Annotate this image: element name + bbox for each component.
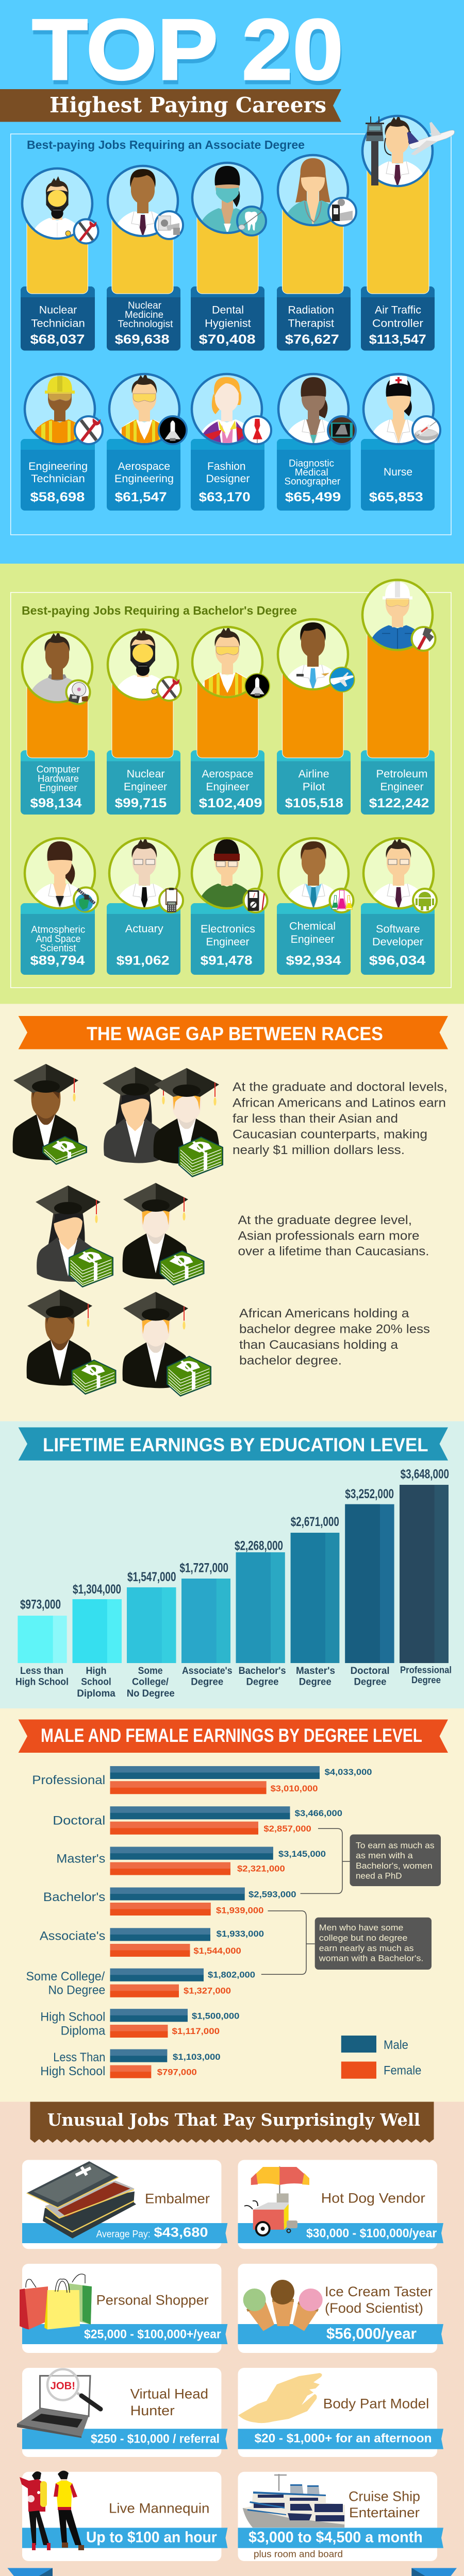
bar labels: Degree [354, 1677, 387, 1688]
job: Diagnostic Medical Sonographer: Sonographer [285, 477, 341, 487]
ribbon heading: THE WAGE GAP BETWEEN RACES [87, 1023, 383, 1044]
graduates group 1 [13, 1064, 223, 1177]
job: Electronics Engineer [191, 838, 267, 975]
job: Nuclear Medicine Technologist: Nuclear [128, 300, 162, 311]
bar values: $3,252,000 [345, 1487, 394, 1501]
male values: $1,500,000 [192, 2011, 239, 2021]
subtitle ribbon [0, 89, 341, 122]
callout: PhD: To earn as much as [356, 1840, 435, 1850]
bar labels: Bachelor's [239, 1666, 286, 1676]
horizontal bar chart [26, 1766, 372, 2078]
card: Ice Cream Taster: $56,000/year [326, 2326, 417, 2342]
job: Aerospace Engineering: Engineering [114, 473, 174, 485]
card: Live Mannequin: Live Mannequin [109, 2501, 209, 2516]
callout: PhD: as men with a [356, 1851, 413, 1860]
job: Diagnostic Medical Sonographer [277, 374, 356, 511]
ribbon heading [19, 1427, 448, 1461]
graduates group 2 [36, 1183, 204, 1287]
male values: $4,033,000 [325, 1767, 372, 1777]
job: Radiation Therapist: Radiation [288, 304, 334, 316]
male values: $3,145,000 [278, 1849, 326, 1859]
job: Petroleum Engineer: Engineer [380, 781, 424, 793]
job: Computer Hardware Engineer: Hardware [38, 774, 79, 785]
job: Fashion Designer: Fashion [207, 461, 246, 472]
text: bachelor degree gap: bachelor degree make 20% less [239, 1322, 430, 1336]
text: bachelor degree gap: than Caucasians holding a [239, 1338, 399, 1352]
bar values [20, 1467, 449, 1612]
text: graduate degree level: Asian professionals earn more [238, 1229, 420, 1243]
bar values: $1,304,000 [73, 1582, 121, 1597]
female values: $1,327,000 [184, 1986, 231, 1995]
heading: bachelor degree: Best-paying Jobs Requiring a Bachelor's Degree [22, 604, 297, 617]
text: graduate degree level [238, 1213, 429, 1258]
job: Engineering Technician: Technician [31, 473, 85, 485]
degree labels [26, 1773, 106, 2078]
job: Radiation Therapist: $76,627 [285, 332, 339, 347]
bar labels: Diploma [77, 1688, 115, 1699]
job: Chemical Engineer: $92,934 [286, 954, 341, 968]
female values: $1,117,000 [172, 2026, 220, 2036]
degree labels: Some College/ [26, 1970, 105, 1984]
job: Actuary: Actuary [125, 923, 163, 935]
job: Petroleum Engineer: $122,242 [369, 796, 429, 810]
section: top 20 highest paying careers [0, 2568, 464, 2576]
job: Nuclear Medicine Technologist [107, 166, 183, 350]
panel frame [11, 134, 451, 535]
text: graduate and doctoral levels: African Americans and Latinos earn [233, 1096, 446, 1110]
job: Chemical Engineer [277, 838, 354, 975]
female values: $797,000 [157, 2067, 197, 2077]
job: Petroleum Engineer: Petroleum [376, 768, 428, 780]
section: male and female earnings [0, 1708, 464, 2102]
text: bachelor degree gap [239, 1307, 430, 1368]
job: Computer Hardware Engineer [21, 631, 95, 815]
graduates group 3 [27, 1290, 211, 1396]
text: graduate and doctoral levels [233, 1080, 448, 1157]
panel frame [11, 592, 451, 988]
banner heading [30, 2102, 434, 2143]
degree labels: High School [40, 2010, 105, 2024]
text: graduate and doctoral levels: At the graduate and doctoral levels, [233, 1080, 448, 1094]
female values [157, 1784, 318, 2077]
bar labels: Associate's [182, 1666, 233, 1676]
job: Airline Pilot: $105,518 [285, 796, 343, 810]
job: Chemical Engineer: Engineer [291, 934, 335, 945]
bar labels: High [86, 1666, 106, 1676]
illustration: shopping bags [20, 2274, 92, 2330]
job: Engineering Technician: $58,698 [30, 490, 85, 504]
job: Actuary: $91,062 [117, 954, 170, 968]
text: graduate and doctoral levels: nearly $1 million dollars less. [233, 1143, 405, 1157]
female values: $2,857,000 [263, 1824, 311, 1834]
text: bachelor degree gap: African Americans holding a [239, 1307, 409, 1320]
card: Hot Dog Vendor [238, 2160, 443, 2249]
job: Nuclear Engineer [107, 629, 181, 815]
job: Petroleum Engineer [361, 580, 435, 815]
job: Air Traffic Controller: Controller [372, 317, 423, 329]
job: Nuclear Engineer: $99,715 [115, 796, 167, 810]
illustration: laptop with magnifier: JOB! [51, 2380, 75, 2392]
job: Computer Hardware Engineer: Engineer [39, 783, 77, 794]
job: Software Developer [361, 837, 437, 975]
callout: some college [315, 1918, 432, 1970]
job: Nurse [361, 374, 440, 511]
job: Nuclear Engineer: Nuclear [127, 768, 165, 780]
text: graduate and doctoral levels: Caucasian counterparts, making [233, 1127, 427, 1142]
text: bachelor degree gap: bachelor degree. [239, 1354, 342, 1368]
illustration: cruise ship [243, 2474, 345, 2528]
card: Hot Dog Vendor: Hot Dog Vendor [321, 2190, 425, 2206]
job: Engineering Technician: Engineering [28, 461, 88, 472]
job: Nuclear Technician: $68,037 [30, 332, 85, 347]
job: Actuary [107, 837, 183, 975]
job: Aerospace Engineering [107, 373, 187, 511]
job: Fashion Designer: Designer [206, 473, 250, 485]
bar labels: Some [138, 1666, 163, 1676]
male values [173, 1767, 372, 2062]
job: Nuclear Engineer: Engineer [124, 781, 167, 793]
job: Fashion Designer: $63,170 [199, 490, 251, 504]
bar labels: High School [15, 1677, 69, 1688]
illustration: hot dog cart [244, 2166, 309, 2235]
card: Ice Cream Taster [238, 2264, 443, 2353]
callout connector: PhD [301, 1828, 350, 1893]
text: graduate and doctoral levels: far less than their Asian and [233, 1112, 398, 1126]
job: Air Traffic Controller: Air Traffic [375, 304, 421, 316]
ribbon heading [19, 1720, 448, 1753]
card: Hot Dog Vendor: $30,000 - $100,000/year [306, 2226, 437, 2240]
card: Personal Shopper: $25,000 - $100,000+/year [84, 2327, 221, 2341]
job: Atmospheric And Space Scientist [21, 838, 98, 975]
job: Nurse: Nurse [384, 466, 412, 478]
job: Nuclear Technician: Nuclear [39, 304, 77, 316]
legend [341, 2036, 421, 2079]
job: Nuclear Technician: Technician [31, 317, 85, 329]
bar labels: Degree [246, 1677, 278, 1688]
title: TOP 20: TOP 20 [32, 1, 343, 98]
card: Body Part Model: Body Part Model [323, 2396, 429, 2411]
card: Cruise Ship Entertainer: plus room and board [254, 2549, 343, 2559]
text: graduate degree level: At the graduate degree level, [238, 1213, 412, 1227]
card: Live Mannequin [20, 2470, 227, 2561]
job: Aerospace Engineer: Engineer [206, 781, 250, 793]
job: Computer Hardware Engineer: Computer [37, 765, 80, 775]
ribbon heading [19, 1016, 448, 1049]
card: Ice Cream Taster: Ice Cream Taster [325, 2284, 433, 2299]
section: associate degree jobs [0, 0, 464, 564]
illustration: coffin [27, 2161, 136, 2239]
text: graduate degree level: over a lifetime than Caucasians. [238, 1244, 429, 1258]
banner heading: Unusual Jobs That Pay Surprisingly Well [47, 2110, 420, 2130]
bar chart [15, 1467, 452, 1699]
female values: $1,939,000 [216, 1906, 263, 1916]
legend: Female [384, 2064, 421, 2078]
heading: associate degree: Best-paying Jobs Requiring an Associate Degree [27, 138, 305, 151]
section: bachelor degree jobs [0, 564, 464, 1004]
bar values: $973,000 [20, 1597, 61, 1612]
job: Engineering Technician [21, 374, 103, 511]
legend: Male [384, 2038, 408, 2052]
bar labels: Professional [400, 1665, 452, 1675]
card: Ice Cream Taster: (Food Scientist) [325, 2300, 423, 2316]
job: Atmospheric And Space Scientist: Scientist [40, 943, 76, 954]
bar values: $1,547,000 [127, 1570, 176, 1584]
bar labels: Degree [299, 1677, 332, 1688]
female values: $1,544,000 [193, 1946, 241, 1956]
job: Electronics Engineer: $91,478 [201, 954, 253, 968]
bar values: $2,671,000 [291, 1515, 339, 1529]
bar labels: Degree [191, 1677, 223, 1688]
bar values: $3,648,000 [401, 1467, 449, 1482]
job: Nurse: $65,853 [369, 490, 423, 504]
job: Computer Hardware Engineer: $98,134 [30, 796, 82, 810]
job: Aerospace Engineering: $61,547 [115, 490, 167, 504]
job: Nuclear Technician [21, 168, 98, 350]
bar labels: School [81, 1677, 111, 1688]
card: Cruise Ship Entertainer: Entertainer [349, 2505, 420, 2520]
illustration: laptop with magnifier [17, 2369, 101, 2438]
card: Personal Shopper [20, 2264, 227, 2353]
job: Airline Pilot: Airline [299, 768, 329, 780]
card: Body Part Model [238, 2368, 443, 2457]
callout: some college: Men who have some [319, 1923, 403, 1933]
bar labels: College/ [132, 1677, 169, 1688]
card: Live Mannequin: Up to $100 an hour [86, 2529, 217, 2546]
job: Dental Hygienist [191, 163, 266, 350]
subtitle ribbon: Highest Paying Careers [49, 93, 326, 117]
job: Diagnostic Medical Sonographer: Medical [295, 467, 328, 478]
job: Nuclear Medicine Technologist: Technologist [118, 319, 173, 330]
degree labels: Master's [56, 1852, 105, 1866]
callout: PhD: Bachelor's, women [356, 1861, 433, 1871]
job: Aerospace Engineer: Aerospace [202, 768, 254, 780]
job: Atmospheric And Space Scientist: And Space [36, 934, 80, 945]
bar labels: No Degree [127, 1688, 175, 1699]
bar values: $1,727,000 [179, 1561, 228, 1575]
card: Virtual Head Hunter: $250 - $10,000 / referral [91, 2432, 220, 2446]
job: Air Traffic Controller: $113,547 [369, 332, 426, 347]
card: Embalmer: Average Pay: [96, 2229, 151, 2240]
callout: PhD: need a PhD [356, 1871, 402, 1881]
degree labels: High School [40, 2064, 105, 2078]
female values: $3,010,000 [271, 1784, 318, 1793]
male values: $1,802,000 [208, 1970, 255, 1979]
male values: $2,593,000 [248, 1889, 296, 1899]
bar labels: Doctoral [351, 1666, 390, 1676]
degree labels: Less Than [53, 2050, 105, 2064]
male values: $1,103,000 [173, 2052, 221, 2062]
card: Personal Shopper: Personal Shopper [96, 2293, 209, 2308]
illustration: ice cream cones [243, 2280, 323, 2331]
bar labels: Less than [20, 1666, 63, 1676]
card: Embalmer [22, 2160, 227, 2249]
callout connector: some college [261, 1911, 315, 1974]
degree labels: Doctoral [53, 1814, 105, 1828]
job: Diagnostic Medical Sonographer: Diagnostic [289, 458, 334, 469]
callout: some college: earn nearly as much as [319, 1943, 413, 1953]
card: Cruise Ship Entertainer [238, 2472, 443, 2561]
card: Embalmer: Embalmer [145, 2191, 210, 2206]
job: Dental Hygienist: Hygienist [205, 317, 251, 329]
degree labels: Bachelor's [43, 1890, 105, 1904]
job: Diagnostic Medical Sonographer: $65,499 [285, 490, 341, 504]
job: Airline Pilot: Pilot [303, 781, 325, 793]
bar labels: Master's [296, 1666, 335, 1676]
card: Cruise Ship Entertainer: Cruise Ship [349, 2488, 420, 2504]
degree labels: Professional [32, 1773, 105, 1787]
job: Electronics Engineer: Engineer [206, 936, 250, 948]
section: lifetime earnings by education level [0, 1421, 464, 1708]
section: unusual jobs [0, 2102, 464, 2576]
job: Fashion Designer [191, 374, 271, 511]
job: Chemical Engineer: Chemical [289, 921, 336, 933]
bar values: $2,268,000 [235, 1538, 283, 1553]
job: Dental Hygienist: Dental [212, 304, 244, 316]
title: TOP 20: TOP 20 [33, 5, 344, 102]
female values: $2,321,000 [237, 1864, 285, 1873]
male values: $3,466,000 [295, 1808, 342, 1818]
job: Electronics Engineer: Electronics [201, 923, 255, 935]
job: Software Developer: $96,034 [369, 954, 426, 968]
job: Atmospheric And Space Scientist: $89,794 [30, 954, 85, 968]
degree labels: Diploma [61, 2024, 106, 2038]
job: Nuclear Medicine Technologist: $69,638 [115, 332, 170, 347]
callout: PhD [350, 1835, 441, 1886]
job: Nuclear Medicine Technologist: Medicine [125, 310, 163, 320]
job: Aerospace Engineer [191, 626, 269, 815]
male values: $1,933,000 [217, 1929, 264, 1939]
card: Body Part Model: $20 - $1,000+ for an afternoon [255, 2431, 432, 2445]
job: Radiation Therapist: Therapist [288, 317, 334, 329]
card: Cruise Ship Entertainer: $3,000 to $4,500 a month [248, 2529, 423, 2546]
banner heading [7, 2568, 457, 2576]
job: Dental Hygienist: $70,408 [199, 332, 256, 347]
job: Software Developer: Software [376, 923, 420, 935]
job: Radiation Therapist [277, 155, 356, 350]
card: Virtual Head Hunter: Virtual Head [130, 2386, 208, 2401]
section: wage gap between races [0, 1004, 464, 1421]
card: Virtual Head Hunter: Hunter [130, 2403, 175, 2418]
callout: some college: woman with a Bachelor's. [319, 1954, 423, 1963]
illustration: mannequins [20, 2470, 84, 2550]
job: Aerospace Engineering: Aerospace [118, 461, 170, 472]
bar labels: Degree [411, 1675, 441, 1685]
card: Virtual Head Hunter [17, 2368, 227, 2457]
degree labels: Associate's [40, 1929, 105, 1943]
job: Software Developer: Developer [372, 936, 423, 948]
job: Airline Pilot [277, 619, 354, 815]
bar labels [15, 1665, 452, 1699]
degree labels: No Degree [48, 1984, 105, 1997]
job: Aerospace Engineer: $102,409 [199, 796, 262, 810]
callout: some college: college but no degree [319, 1933, 407, 1943]
job: Atmospheric And Space Scientist: Atmospheric [31, 925, 85, 936]
card: Embalmer: $43,680 [154, 2225, 208, 2240]
illustration: hand [238, 2373, 322, 2423]
job: Air Traffic Controller [361, 115, 455, 350]
ribbon heading: LIFETIME EARNINGS BY EDUCATION LEVEL [43, 1434, 428, 1455]
